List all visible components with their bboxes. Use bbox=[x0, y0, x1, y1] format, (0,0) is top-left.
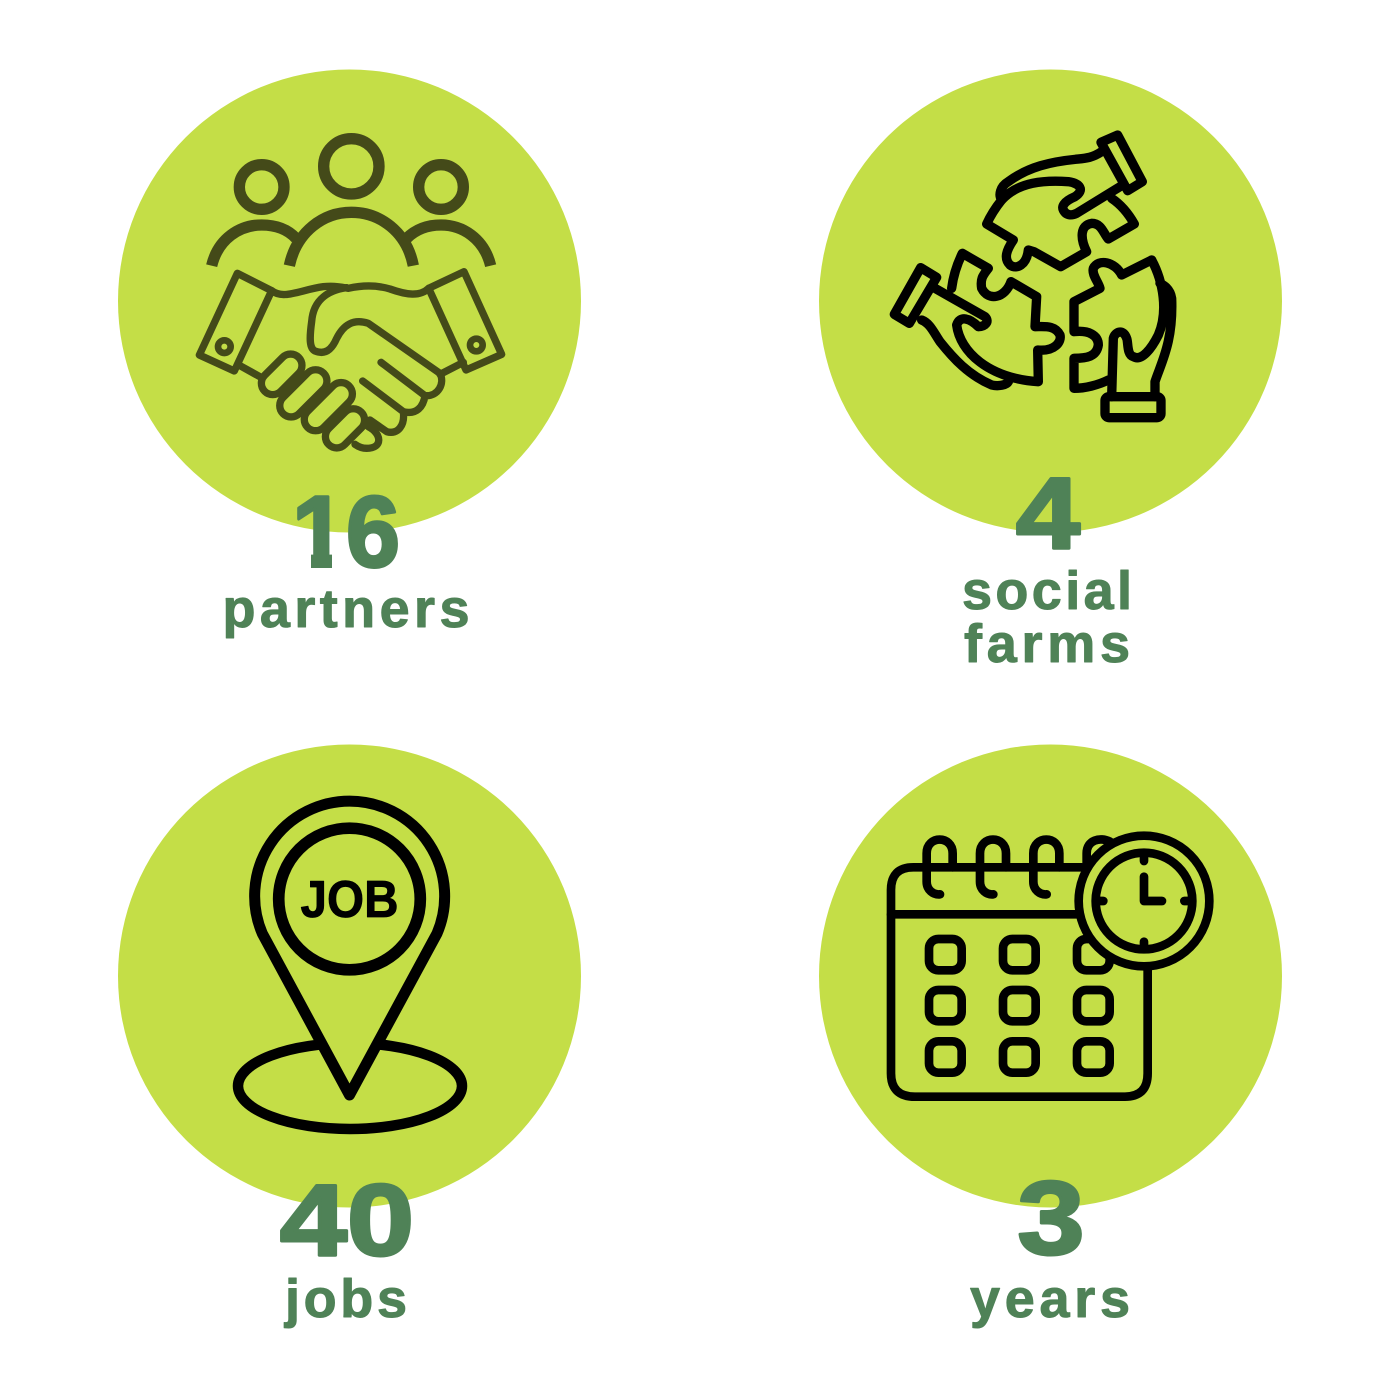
green circle: jobs bbox=[118, 744, 581, 1208]
stat: 40: 40 bbox=[280, 1165, 414, 1277]
label: jobs: jobs bbox=[284, 1269, 407, 1329]
stat: 16: 16 bbox=[292, 476, 400, 588]
label: social farms: farms bbox=[964, 614, 1130, 674]
label: partners: partners bbox=[222, 579, 470, 639]
stat: 4: 4 bbox=[1016, 458, 1080, 570]
panel: partners bbox=[118, 70, 581, 639]
icon: hands holding puzzle pieces bbox=[894, 135, 1172, 418]
panel: jobs bbox=[118, 744, 581, 1329]
label: years: years bbox=[970, 1269, 1130, 1329]
green circle: social farms bbox=[819, 70, 1282, 532]
icon: job location pin: JOB bbox=[300, 871, 398, 929]
icon: job location pin bbox=[238, 801, 462, 1129]
panel: years bbox=[819, 744, 1282, 1329]
panel: social farms bbox=[819, 70, 1282, 674]
label: social farms bbox=[962, 561, 1132, 674]
stat: 3: 3 bbox=[1018, 1161, 1084, 1277]
icon: people and handshake bbox=[199, 139, 502, 453]
green circle: partners bbox=[118, 70, 581, 532]
label: social farms: social bbox=[962, 561, 1132, 621]
icon: calendar with clock bbox=[891, 836, 1209, 1097]
green circle: years bbox=[819, 744, 1282, 1208]
